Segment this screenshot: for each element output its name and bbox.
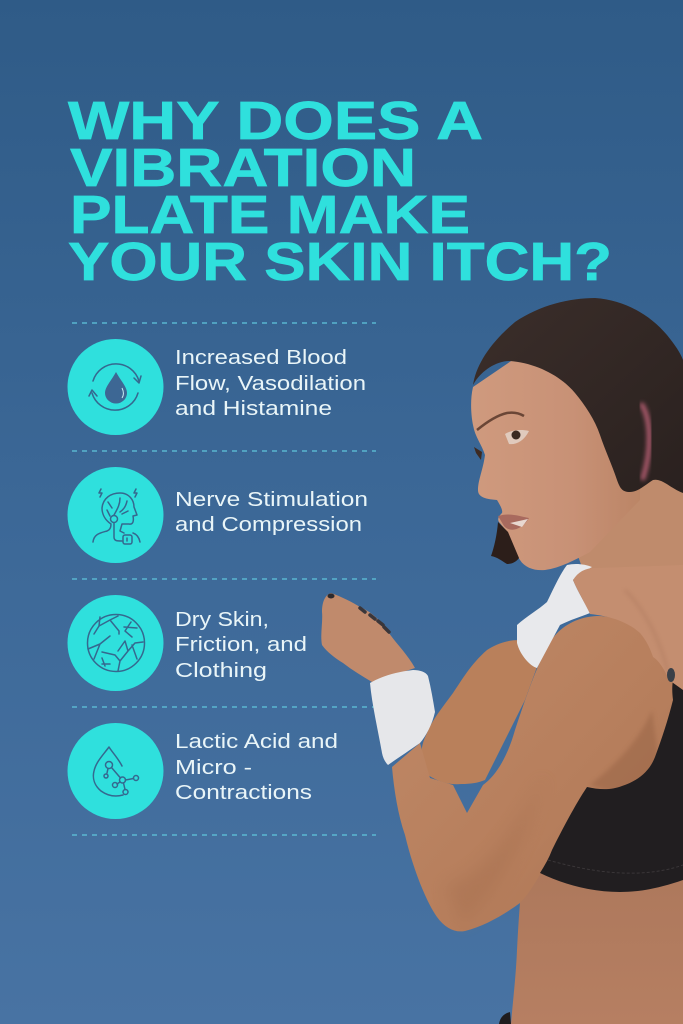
hair <box>473 298 683 493</box>
text: blood flow: and Histamine <box>175 398 332 420</box>
text: dry skin: Dry Skin, <box>175 609 269 631</box>
text: nerve stimulation: Nerve Stimulation <box>175 489 368 511</box>
text: lactic acid: Micro - <box>175 757 252 779</box>
title: VIBRATION <box>70 138 416 198</box>
lower wristband <box>370 670 435 765</box>
text: nerve stimulation: and Compression <box>175 514 362 536</box>
title <box>68 91 612 292</box>
neck <box>560 470 683 590</box>
sports bra <box>540 667 683 892</box>
list item: dry skin <box>68 595 307 691</box>
text: lactic acid <box>175 731 338 804</box>
text: blood flow: Increased Blood <box>175 347 347 369</box>
upper wristband <box>517 564 592 668</box>
text: blood flow <box>175 347 366 420</box>
torso <box>511 780 683 1024</box>
mouth <box>498 514 529 530</box>
list item: lactic acid <box>68 723 338 819</box>
face <box>471 355 640 570</box>
nail <box>667 668 675 682</box>
photo: woman scratching shoulder <box>321 298 683 1024</box>
arm <box>392 616 683 931</box>
title: PLATE MAKE <box>70 185 470 245</box>
left hand <box>321 593 415 682</box>
text: nerve stimulation <box>175 489 368 536</box>
text: dry skin: Clothing <box>175 660 267 682</box>
text: dry skin <box>175 609 307 682</box>
list item: blood flow <box>68 339 366 435</box>
eyes and brows <box>474 413 529 460</box>
text: blood flow: Flow, Vasodilation <box>175 373 366 395</box>
list item: nerve stimulation <box>68 467 368 563</box>
text: lactic acid: Contractions <box>175 782 312 804</box>
hair tuft <box>491 522 519 564</box>
title: YOUR SKIN ITCH? <box>68 232 612 292</box>
title: WHY DOES A <box>68 91 483 151</box>
text: dry skin: Friction, and <box>175 634 307 656</box>
hand on shoulder <box>573 565 683 690</box>
text: lactic acid: Lactic Acid and <box>175 731 338 753</box>
rear forearm <box>422 640 537 784</box>
waistband <box>499 1012 511 1024</box>
icon: water drop with circular arrows <box>68 339 164 435</box>
icon: drop with molecule <box>68 723 164 819</box>
icon: head with nerves <box>68 467 164 563</box>
icon: cracked skin <box>68 595 164 691</box>
